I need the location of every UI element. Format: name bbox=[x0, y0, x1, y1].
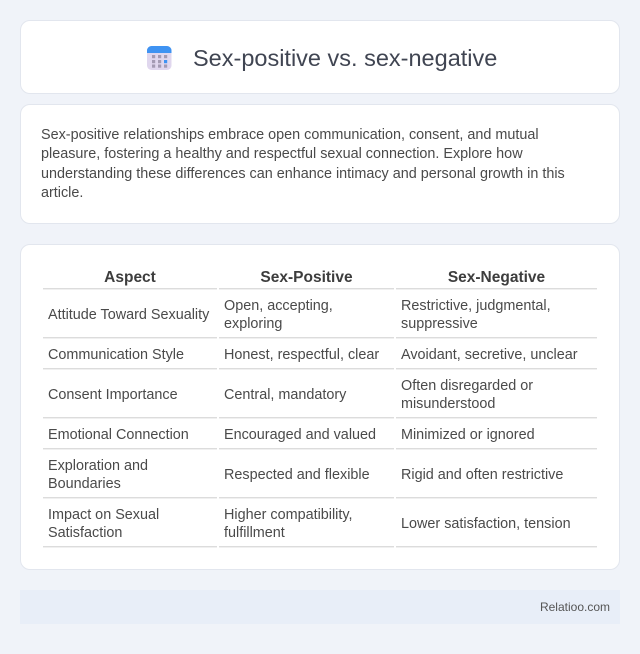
cell: Honest, respectful, clear bbox=[224, 347, 379, 363]
cell: Minimized or ignored bbox=[401, 427, 535, 443]
row: Consent Importance: Consent Importance bbox=[48, 387, 178, 403]
cell: Central, mandatory bbox=[224, 387, 346, 403]
row: Exploration and Boundaries: Exploration and bbox=[48, 458, 148, 474]
cell: misunderstood bbox=[401, 396, 495, 412]
row: Emotional Connection: Emotional Connection bbox=[48, 427, 189, 443]
row: Exploration and Boundaries bbox=[48, 458, 148, 492]
panel: introduction bbox=[20, 104, 620, 224]
header: Sex-Negative: Sex-Negative bbox=[448, 269, 545, 286]
footer bar bbox=[20, 590, 620, 624]
row: Communication Style: Communication Style bbox=[48, 347, 184, 363]
cell bbox=[224, 298, 333, 332]
title: Sex-positive vs. sex-negative bbox=[193, 45, 497, 71]
row: Impact on Sexual Satisfaction: Impact on Sexual bbox=[48, 507, 159, 523]
row: Impact on Sexual Satisfaction bbox=[48, 507, 159, 541]
panel: title card bbox=[20, 20, 620, 94]
cell: Restrictive, judgmental, bbox=[401, 298, 551, 314]
icon: calendar bbox=[147, 46, 172, 70]
header: Aspect: Aspect bbox=[104, 269, 156, 286]
row: Attitude Toward Sexuality: Attitude Toward Sexuality bbox=[48, 307, 209, 323]
intro text: understanding these differences can enhance intimacy and personal growth in this bbox=[41, 166, 565, 182]
panel: comparison table bbox=[20, 244, 620, 570]
cell bbox=[401, 378, 533, 412]
cell: Rigid and often restrictive bbox=[401, 467, 563, 483]
cell bbox=[401, 298, 551, 332]
intro text: Sex-positive relationships embrace open communication, consent, and mutual bbox=[41, 127, 539, 143]
cell: fulfillment bbox=[224, 525, 285, 541]
intro text: pleasure, fostering a healthy and respectful sexual connection. Explore how bbox=[41, 146, 523, 162]
intro text: article. bbox=[41, 185, 83, 201]
cell: Higher compatibility, bbox=[224, 507, 352, 523]
cell: Avoidant, secretive, unclear bbox=[401, 347, 578, 363]
cell: suppressive bbox=[401, 316, 478, 332]
cell: Lower satisfaction, tension bbox=[401, 516, 571, 532]
cell: Open, accepting, bbox=[224, 298, 333, 314]
cell: Encouraged and valued bbox=[224, 427, 376, 443]
cell: Often disregarded or bbox=[401, 378, 533, 394]
row: Impact on Sexual Satisfaction: Satisfaction bbox=[48, 525, 122, 541]
header: Sex-Positive: Sex-Positive bbox=[260, 269, 353, 286]
cell bbox=[224, 507, 352, 541]
cell: exploring bbox=[224, 316, 282, 332]
row: Exploration and Boundaries: Boundaries bbox=[48, 476, 121, 492]
cell: Respected and flexible bbox=[224, 467, 370, 483]
footer credit: Relatioo.com bbox=[540, 600, 610, 614]
intro text bbox=[41, 127, 565, 201]
